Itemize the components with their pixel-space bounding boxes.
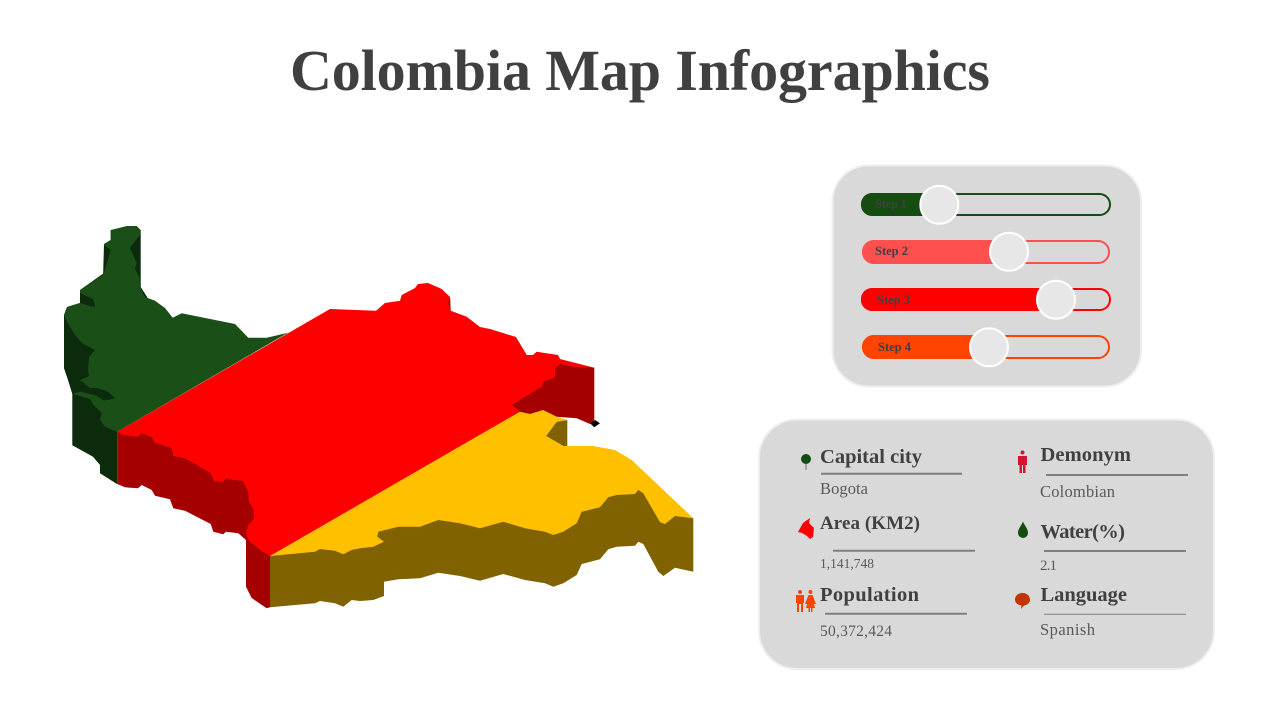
- fact: capital city: [801, 446, 962, 498]
- fact: population: 50,372,424: [820, 623, 892, 640]
- slider: step 2: Step 2: [875, 244, 908, 258]
- fact: demonym: Demonym: [1040, 444, 1131, 466]
- fact: language: [1015, 584, 1186, 639]
- fact: area: [798, 513, 975, 571]
- small black diamond: [590, 420, 600, 427]
- fact: language: Spanish: [1040, 620, 1096, 639]
- fact: population: [796, 584, 967, 640]
- slider: step 4: [862, 328, 1109, 366]
- fact: water: [1018, 521, 1186, 574]
- fact: capital city: Bogota: [820, 479, 869, 498]
- fact: area: Area (KM2): [820, 513, 920, 534]
- slider: step 1: Step 1: [875, 197, 907, 211]
- map region: yellow southeast: [270, 410, 693, 607]
- fact: language: Language: [1040, 584, 1127, 606]
- fact: population: Population: [820, 584, 920, 606]
- fact: demonym: [1018, 444, 1188, 501]
- slider: step 4: Step 4: [878, 340, 912, 354]
- slider: step 2: [862, 233, 1109, 271]
- slider: step 1: [861, 186, 1110, 224]
- fact: demonym: Colombian: [1040, 482, 1115, 501]
- panel: country facts: [759, 420, 1214, 669]
- fact: area: 1,141,748: [820, 556, 874, 571]
- title: Colombia Map Infographics: [290, 38, 990, 103]
- map region: red central: [117, 283, 594, 608]
- panel: progress sliders: [832, 166, 1141, 386]
- 3D map of Colombia: [64, 226, 693, 608]
- fact: water: 2.1: [1040, 558, 1057, 574]
- slider: step 3: Step 3: [877, 293, 910, 307]
- slider: step 3: [861, 281, 1110, 319]
- fact: water: Water(%): [1040, 521, 1125, 543]
- map region: green northwest: [64, 226, 288, 484]
- fact: capital city: Capital city: [820, 446, 923, 468]
